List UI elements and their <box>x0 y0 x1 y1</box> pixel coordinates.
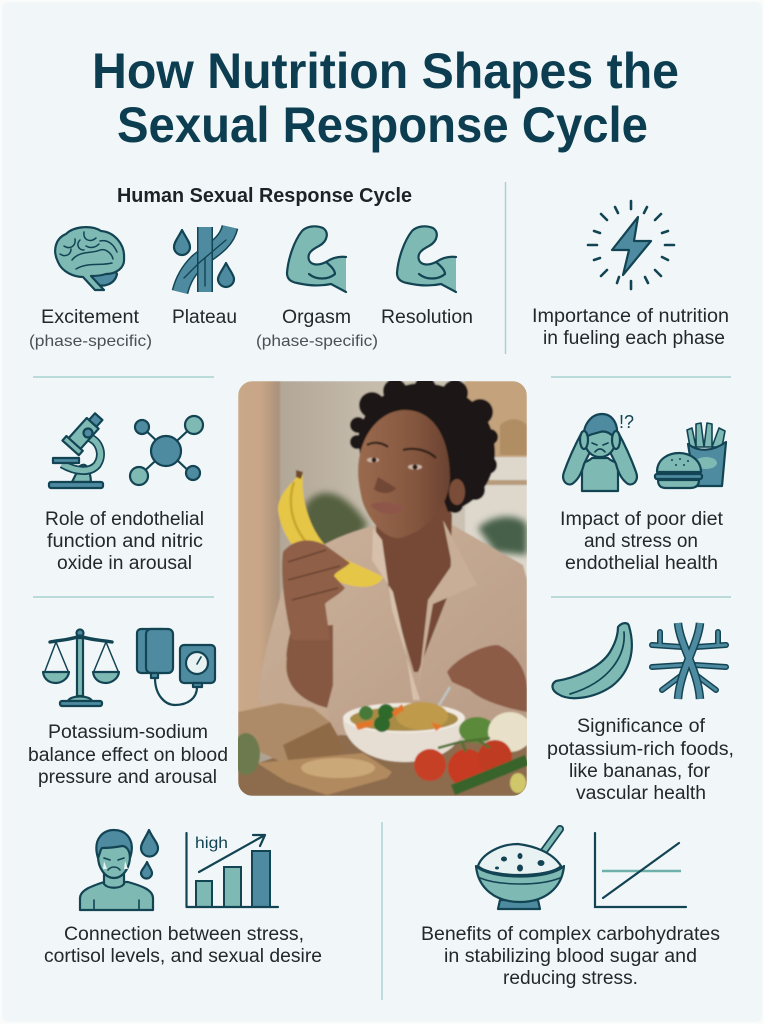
label: resolution: Resolution <box>381 307 473 328</box>
bowl <box>343 720 465 762</box>
face <box>358 410 450 538</box>
panel: endothelial function <box>45 409 204 574</box>
panel: potassium-sodium balance <box>28 629 228 788</box>
text: stress and cortisol: cortisol levels, and sexual desire <box>44 946 322 967</box>
panel: complex carbohydrates <box>421 829 720 989</box>
icon: banana <box>552 623 632 698</box>
panel: poor diet and stress <box>560 412 726 574</box>
text: importance: in fueling each phase <box>543 328 725 349</box>
panel: human sexual response cycle <box>29 185 473 350</box>
bread <box>238 702 330 762</box>
text: poor diet <box>560 509 724 574</box>
chart: stable blood sugar line <box>595 833 686 907</box>
text: importance: Importance of nutrition <box>532 306 729 327</box>
text: poor diet: Impact of poor diet <box>560 509 724 530</box>
icon: microscope <box>49 409 107 488</box>
icon: blood vessel network <box>652 623 726 699</box>
text: importance <box>532 306 729 349</box>
text: poor diet: and stress on <box>584 531 698 552</box>
chart: rising cortisol bars <box>186 833 278 907</box>
title <box>92 43 679 153</box>
text: potassium-rich foods <box>547 716 734 804</box>
left sleeve <box>263 657 327 710</box>
title: Sexual Response Cycle <box>117 97 648 153</box>
label: plateau: Plateau <box>172 307 237 328</box>
tomatoes <box>414 749 446 781</box>
left forearm <box>286 625 333 709</box>
icon: scales <box>43 630 119 706</box>
icon: flexed arm (resolution) <box>397 226 456 292</box>
collars and placket <box>372 528 420 700</box>
text: complex carbohydrates: in stabilizing blood sugar and <box>444 946 697 967</box>
text: potassium-rich foods: potassium-rich foods, <box>547 739 734 760</box>
icon: molecule <box>130 416 203 485</box>
avocado <box>238 732 260 776</box>
greens and cauliflower <box>459 717 495 743</box>
title: How Nutrition Shapes the <box>92 43 679 99</box>
icon: blood pressure monitor <box>137 629 215 705</box>
text: potassium-sodium <box>28 722 228 788</box>
icon: exclamation question: !? <box>619 412 634 432</box>
text: potassium-rich foods: vascular health <box>576 783 706 804</box>
text: potassium-rich foods: Significance of <box>577 716 706 737</box>
text: potassium-sodium: Potassium-sodium <box>48 722 208 743</box>
table <box>238 735 527 796</box>
text: stress and cortisol <box>44 924 322 967</box>
icon: flexed arm (orgasm) <box>287 226 346 292</box>
text: stress and cortisol: Connection between stress, <box>64 924 304 945</box>
hair <box>350 377 498 513</box>
icon: stressed person <box>563 414 637 491</box>
shirt <box>257 520 527 740</box>
heading: cycle: Human Sexual Response Cycle <box>117 185 412 207</box>
label: orgasm: Orgasm <box>282 307 351 328</box>
icon: blood vessels and drops <box>174 227 234 292</box>
text: potassium-sodium: balance effect on blood <box>28 745 228 766</box>
text: endothelial function <box>45 509 204 574</box>
right hand and fork <box>447 645 527 712</box>
panel: potassium-rich foods <box>547 623 734 804</box>
hand holding banana <box>282 540 350 640</box>
text: complex carbohydrates: reducing stress. <box>503 968 638 989</box>
label: phase-specific right: (phase-specific) <box>256 333 378 350</box>
text: potassium-sodium: pressure and arousal <box>38 767 217 788</box>
text: complex carbohydrates: Benefits of complex carbohydrates <box>421 924 720 945</box>
neck and chest <box>376 490 452 672</box>
text: poor diet: endothelial health <box>565 553 718 574</box>
panel: importance of nutrition <box>532 201 729 349</box>
icon: fries and burger <box>655 423 726 488</box>
photo: woman holding banana at table <box>232 377 532 796</box>
chart: rising cortisol bars: high <box>195 835 228 852</box>
text: endothelial function: Role of endothelial <box>45 509 204 530</box>
icon: lightning bolt with rays <box>588 201 674 289</box>
text: complex carbohydrates <box>421 924 720 989</box>
text: endothelial function: oxide in arousal <box>57 553 192 574</box>
cucumber <box>453 760 527 790</box>
banana <box>278 472 383 587</box>
text: potassium-rich foods: like bananas, for <box>569 761 711 782</box>
text: endothelial function: function and nitric <box>47 531 203 552</box>
icon: sad sweating man <box>80 830 158 910</box>
icon: bowl of grains with spoon <box>476 829 564 909</box>
label: phase-specific left: (phase-specific) <box>29 333 152 350</box>
board and oats <box>257 753 392 795</box>
panel: stress and cortisol <box>44 830 322 967</box>
label: excitement: Excitement <box>41 307 140 328</box>
icon: brain <box>55 227 124 290</box>
